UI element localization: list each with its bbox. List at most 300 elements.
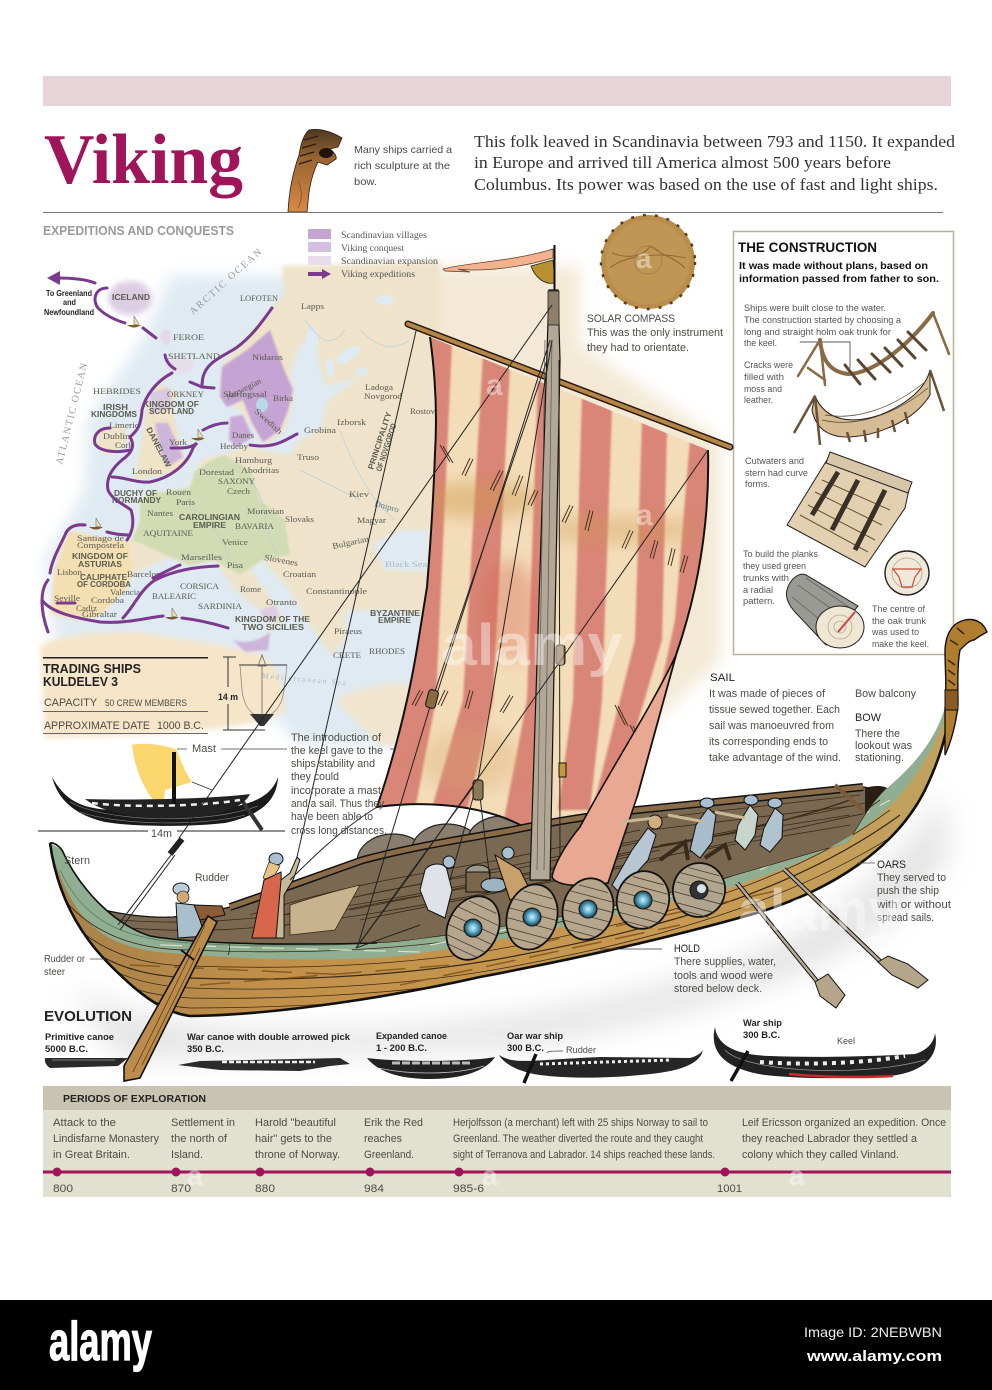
oars text: They served to <box>877 872 946 884</box>
map labels: NORMANDY <box>112 496 162 505</box>
14 m front-view diagram: 14 m <box>218 692 238 703</box>
sculpture note <box>354 144 452 188</box>
map legend: Scandinavian villages <box>341 231 427 241</box>
trunk cross-section illustration <box>885 551 929 595</box>
hold text <box>600 943 776 995</box>
construction step 5 text <box>871 604 929 649</box>
map labels: SARDINIA <box>198 601 243 611</box>
kuldelev ship diagram <box>52 744 278 830</box>
map labels: Mediterranean Sea <box>262 671 347 687</box>
evolution stage: oar war ship: Rudder <box>566 1045 596 1055</box>
crew at stern <box>173 795 783 938</box>
map labels: IRISH <box>103 403 128 412</box>
evolution stage: war ship <box>714 1018 936 1081</box>
evolution stage: war canoe: 350 B.C. <box>187 1044 224 1055</box>
map labels: ASTURIAS <box>78 560 123 569</box>
map labels: Croatian <box>283 569 317 579</box>
14 m front-view diagram <box>218 655 287 730</box>
reef ties <box>412 445 688 746</box>
map legend: Viking conquest <box>341 244 404 254</box>
construction step 2 text: Cracks were <box>744 360 793 370</box>
stock watermarks: alamy <box>441 613 623 678</box>
map labels: Moravian <box>247 506 285 516</box>
bow text: lookout was <box>855 740 912 752</box>
construction step 5 text: make the keel. <box>872 639 929 649</box>
construction step 3 text: forms. <box>745 479 770 489</box>
timeline years: 880 <box>255 1183 275 1195</box>
log illustration <box>786 574 864 648</box>
map labels: Izborsk <box>337 417 367 427</box>
intro text: Columbus. Its power was based on the use of fast and light ships. <box>474 175 938 194</box>
british isles <box>135 383 185 480</box>
construction step 4 text: they used green <box>743 561 806 571</box>
event 800: in Great Britain. <box>53 1149 130 1161</box>
bow text <box>855 688 916 764</box>
bow text: There the <box>855 728 900 740</box>
sculpture note: bow. <box>354 176 377 188</box>
map labels: Paris <box>176 497 195 507</box>
deck frame illustration <box>787 452 912 567</box>
map labels: Bulgarian <box>331 533 370 551</box>
solar compass text <box>587 313 723 354</box>
timeline years: 984 <box>364 1183 384 1195</box>
construction step 1 text: Ships were built close to the water. <box>744 303 886 313</box>
sail <box>376 336 710 825</box>
part labels: stern, rudder, steer <box>44 855 229 978</box>
carved dragon prow <box>945 620 987 755</box>
map labels: Hamburg <box>235 455 273 465</box>
evolution stage: war canoe: War canoe with double arrowed pick <box>187 1032 351 1043</box>
sail text <box>709 672 841 764</box>
trading ships table <box>43 657 208 734</box>
black hull <box>52 777 278 826</box>
map labels: SHETLAND <box>168 351 220 361</box>
map labels: Magyar <box>357 515 386 525</box>
map labels: OF CORDOBA <box>77 580 131 589</box>
stock watermarks: a <box>789 1160 805 1191</box>
event 985-6: Greenland. The weather diverted the route and they caught <box>453 1133 703 1145</box>
keel paragraph: have been able to <box>291 811 373 823</box>
event 880: hair" gets to the <box>255 1133 332 1145</box>
evolution stage: primitive canoe: Primitive canoe <box>45 1032 114 1043</box>
construction step 1 text <box>744 303 901 348</box>
event 985-6: sight of Terranova and Labrador. 14 ships reached these lands. <box>453 1149 715 1161</box>
timeline <box>43 1168 951 1176</box>
icon: carved bow sculpture <box>288 129 342 212</box>
map labels: PRINCIPALITY <box>366 410 394 471</box>
evolution stage: war ship: War ship <box>743 1018 782 1029</box>
purple: scandinavian villages <box>220 330 293 442</box>
map labels: CAROLINGIAN <box>179 513 240 522</box>
14m dimension: 14m <box>151 828 172 840</box>
evolution stage: expanded canoe: Expanded canoe <box>376 1031 447 1042</box>
intro text: This folk leaved in Scandinavia between 793 and 1150. It expanded <box>474 132 956 151</box>
sculpture note: rich sculpture at the <box>354 160 450 172</box>
trading ships table: TRADING SHIPS <box>43 661 141 676</box>
map labels: ARCTIC OCEAN <box>188 247 264 317</box>
map labels: Shiringssal <box>223 389 268 399</box>
construction step 5 text: the oak trunk <box>872 616 927 626</box>
yard <box>408 324 730 447</box>
mast <box>530 290 560 880</box>
map labels: Slovenes <box>264 552 299 568</box>
keel paragraph <box>291 732 387 837</box>
event 1001 <box>742 1117 946 1161</box>
event 1001: colony which they called Vinland. <box>742 1149 899 1161</box>
construction step 2 text <box>744 360 793 405</box>
map labels: LOFOTEN <box>240 293 278 303</box>
stock watermarks: a <box>636 499 653 532</box>
part labels: stern, rudder, steer: Stern <box>64 855 90 867</box>
map legend: Scandinavian expansion <box>341 257 438 267</box>
small boats on routes <box>89 316 205 620</box>
map labels: TWO SICILIES <box>242 623 305 632</box>
map labels: BYZANTINE <box>370 609 421 618</box>
hull frame illustration <box>794 370 944 445</box>
title: Viking <box>44 121 243 199</box>
sea <box>45 276 432 745</box>
map labels: Lapps <box>301 301 324 311</box>
stock watermarks: a <box>636 243 652 274</box>
event 870: Settlement in <box>171 1117 235 1129</box>
map labels: Limeric <box>109 420 139 430</box>
rigging ropes <box>118 305 708 948</box>
rivers and borders <box>180 320 410 560</box>
map labels: Lisbon <box>57 567 83 577</box>
map labels: KINGDOM OF <box>72 552 128 561</box>
solar compass text: This was the only instrument <box>587 327 723 339</box>
panel: the construction <box>734 232 954 654</box>
evolution stage: war ship: Keel <box>837 1036 855 1047</box>
plank lines <box>40 800 930 1008</box>
lakes of the north <box>306 295 394 378</box>
solar compass text: SOLAR COMPASS <box>587 313 675 325</box>
map labels: To Greenland <box>46 289 92 298</box>
map labels: DUCHY OF <box>114 489 157 498</box>
map labels: Marseilles <box>181 552 222 562</box>
map labels <box>44 247 436 687</box>
trading ships table: 50 CREW MEMBERS <box>105 698 187 708</box>
construction step 4 text: trunks with <box>743 573 789 583</box>
event 800 <box>53 1117 159 1161</box>
map labels: Dnipro <box>373 498 400 514</box>
evolution stage: war ship: 300 B.C. <box>743 1030 780 1041</box>
map labels: ICELAND <box>112 293 150 302</box>
oars text: spread sails. <box>877 912 934 924</box>
event 1001: Leif Ericsson organized an expedition. Once <box>742 1117 946 1129</box>
map labels: DANELAW <box>144 426 173 469</box>
map labels: BALEARIC <box>152 591 196 601</box>
map labels: AQUITAINE <box>143 528 193 538</box>
steering oar <box>124 916 217 1081</box>
map labels: Compostela <box>77 540 124 550</box>
footer bar <box>0 1300 992 1390</box>
event 880: throne of Norway. <box>255 1149 340 1161</box>
map labels: Abodritas <box>241 465 279 475</box>
sail text: tissue sewed together. Each <box>709 704 840 716</box>
map labels: Rouen <box>166 487 192 497</box>
evolution stage: oar war ship: Oar war ship <box>507 1031 563 1042</box>
oars text <box>857 859 951 924</box>
map labels: KINGDOM OF THE <box>235 615 311 624</box>
right oars <box>737 869 928 1008</box>
stock watermarks: a <box>486 369 503 402</box>
map labels: Newfoundland <box>44 308 94 317</box>
map labels: Cadiz <box>76 603 97 613</box>
bow text: BOW <box>855 712 882 724</box>
construction step 4 text: a radial <box>743 585 773 595</box>
map labels: Novgorod <box>364 391 403 401</box>
part labels: stern, rudder, steer: Rudder <box>195 872 229 884</box>
map legend: Viking expeditions <box>341 270 415 280</box>
construction step 5 text: The centre of <box>872 604 925 614</box>
hull interior <box>62 785 890 944</box>
stock watermarks: a <box>187 1160 203 1191</box>
map labels: Swedish <box>253 406 285 437</box>
periods header band <box>43 1086 951 1110</box>
map labels: Nantes <box>147 508 173 518</box>
masthead flag <box>443 245 556 290</box>
map labels: Valencia <box>110 587 140 597</box>
trading ships table: KULDELEV 3 <box>43 674 118 689</box>
construction step 1 text: long and straight holm oak trunk for <box>744 327 891 337</box>
map labels: KINGDOMS <box>91 410 138 419</box>
footer logo: alamy <box>49 1310 152 1372</box>
event 800: Attack to the <box>53 1117 116 1129</box>
map labels: Constantinople <box>306 586 367 596</box>
periods heading: PERIODS OF EXPLORATION <box>63 1093 206 1105</box>
event 985-6: Herjolfsson (a merchant) left with 25 ships Norway to sail to <box>453 1117 708 1129</box>
map labels: SCOTLAND <box>149 407 194 416</box>
map labels: Santiago de <box>77 533 124 543</box>
map labels: Nidaros <box>252 352 283 362</box>
map labels: CORSICA <box>180 581 220 591</box>
event 1001: they reached Labrador they settled a <box>742 1133 918 1145</box>
event 985-6 <box>453 1117 715 1161</box>
timeline years: 870 <box>171 1183 191 1195</box>
construction subheading: It was made without plans, based on <box>739 260 928 272</box>
map labels: Otranto <box>266 597 297 607</box>
timeline years: 1001 <box>717 1183 742 1195</box>
construction step 5 text: was used to <box>871 627 919 637</box>
map labels: London <box>132 466 163 476</box>
map labels: Rome <box>240 584 261 594</box>
green strake <box>50 708 948 960</box>
icon: solar compass <box>601 215 695 309</box>
map: expeditions and conquests <box>40 247 720 745</box>
expeditions heading: EXPEDITIONS AND CONQUESTS <box>43 224 234 238</box>
construction step 4 text <box>743 549 818 606</box>
construction step 2 text: filled with <box>744 372 784 382</box>
hold text: HOLD <box>674 943 700 955</box>
footer url: www.alamy.com <box>806 1348 942 1365</box>
keel paragraph: and a sail. Thus they <box>291 798 384 810</box>
construction step 4 text: To build the planks <box>743 549 818 559</box>
map labels: Norwegian <box>224 375 263 402</box>
panel: periods of exploration <box>43 1086 951 1197</box>
oars text: with or without <box>876 899 951 911</box>
map labels: Ladoga <box>365 382 393 392</box>
map labels: EMPIRE <box>378 616 412 625</box>
oars text: OARS <box>877 859 906 871</box>
part labels: stern, rudder, steer: Rudder or <box>44 954 86 965</box>
map labels: Dublin <box>103 431 131 441</box>
event 800: Lindisfarne Monastery <box>53 1133 159 1145</box>
expedition routes <box>42 271 297 632</box>
carolingian green <box>132 455 290 575</box>
construction step 3 text <box>745 456 808 489</box>
evolution stage: expanded canoe <box>367 1031 495 1079</box>
oars text: push the ship <box>877 885 939 897</box>
keel illustration <box>798 313 949 385</box>
sail text: its corresponding ends to <box>709 736 828 748</box>
land <box>50 262 440 655</box>
event 880 <box>255 1117 340 1161</box>
map labels: FEROE <box>173 332 204 342</box>
hold text: There supplies, water, <box>674 956 776 968</box>
sail text: take advantage of the wind. <box>709 752 841 764</box>
part labels: stern, rudder, steer: steer <box>44 967 66 978</box>
keel paragraph: they could <box>291 771 339 783</box>
cream map fade behind sail <box>300 266 720 735</box>
keel paragraph: ships stability and <box>291 758 375 770</box>
mast label: Mast <box>192 743 216 755</box>
event 880: Harold "beautiful <box>255 1117 336 1129</box>
map labels: Czech <box>227 486 251 496</box>
keel paragraph: cross long distances. <box>291 825 387 837</box>
top banner <box>43 76 951 106</box>
map labels: Rostov <box>410 406 436 416</box>
map labels: RHODES <box>369 646 405 656</box>
map labels: Kiev <box>349 489 370 499</box>
event 870: Island. <box>171 1149 203 1161</box>
sail text: sail was manoeuvred from <box>709 720 834 732</box>
hold text: stored below deck. <box>674 983 762 995</box>
map labels: Hedeby <box>220 441 249 451</box>
map labels: and <box>63 298 76 307</box>
map labels: CRETE <box>333 650 361 660</box>
far side shields <box>357 816 538 890</box>
sail text: SAIL <box>710 672 735 684</box>
bow text: Bow balcony <box>855 688 916 700</box>
map labels: KINGDOM OF <box>143 400 199 409</box>
keel paragraph: The introduction of <box>291 732 382 744</box>
construction step 4 text: pattern. <box>743 596 775 606</box>
evolution section <box>44 1008 936 1083</box>
construction subheading: information passed from father to son. <box>739 273 939 285</box>
helmsman <box>173 883 225 938</box>
image id: Image ID: 2NEBWBN <box>804 1324 942 1340</box>
side shields <box>436 857 731 968</box>
construction step 2 text: moss and <box>744 384 782 394</box>
map labels: BAVARIA <box>235 521 275 531</box>
lookout with red cape <box>252 853 300 938</box>
evolution stage: expanded canoe: 1 - 200 B.C. <box>376 1043 427 1054</box>
map labels: York <box>169 437 188 447</box>
map legend <box>308 229 438 280</box>
crew working at barrels <box>420 847 530 918</box>
event 984: reaches <box>364 1133 402 1145</box>
evolution heading: EVOLUTION <box>44 1008 132 1025</box>
map labels: HEBRIDES <box>93 386 141 396</box>
construction subheading <box>739 260 939 285</box>
construction step 1 text: The construction started by choosing a <box>744 315 901 325</box>
construction heading: THE CONSTRUCTION <box>738 239 877 255</box>
map labels: ATLANTIC OCEAN <box>54 362 90 466</box>
lower sail lobe over the deck <box>552 655 676 885</box>
construction step 1 text: the keel. <box>744 338 777 348</box>
map labels: Seville <box>54 593 80 603</box>
map labels: Dorestad <box>199 467 235 477</box>
keel paragraph: the keel gave to the <box>291 745 383 757</box>
map labels: SAXONY <box>218 476 255 486</box>
map labels: Pisa <box>227 560 243 570</box>
evolution stage: oar war ship: 300 B.C. <box>507 1043 544 1054</box>
event 984: Erik the Red <box>364 1117 423 1129</box>
halyard and blocks <box>556 360 566 860</box>
timeline years: 800 <box>53 1183 73 1195</box>
event 870: the north of <box>171 1133 228 1145</box>
construction step 2 text: leather. <box>744 395 773 405</box>
map labels: Slovaks <box>285 514 314 524</box>
evolution stage: primitive canoe: 5000 B.C. <box>45 1044 88 1055</box>
evolution stage: oar war ship <box>499 1031 703 1083</box>
stock watermarks <box>187 243 900 1191</box>
construction step 3 text: Cutwaters and <box>745 456 804 466</box>
construction step 3 text: stern had curve <box>745 468 808 478</box>
sculpture note: Many ships carried a <box>354 144 452 156</box>
map labels: Barcelona <box>127 569 165 579</box>
map labels: Cordoba <box>91 595 124 605</box>
timeline years <box>53 1183 742 1195</box>
event 984 <box>364 1117 423 1161</box>
event 984: Greenland. <box>364 1149 414 1161</box>
stock watermarks: a <box>482 1160 498 1191</box>
bow text: stationing. <box>855 752 904 764</box>
map labels: ORKNEY <box>167 389 204 399</box>
keel paragraph: incorporate a mast <box>291 785 381 797</box>
evolution stage: war canoe <box>178 1032 351 1071</box>
stock watermarks: alamy <box>738 878 900 943</box>
trading ships table: CAPACITY <box>44 697 98 709</box>
map labels: CALIPHATE <box>80 573 128 582</box>
map labels: Cork <box>115 440 134 450</box>
evolution stage: primitive canoe <box>45 1032 128 1068</box>
solar compass text: they had to orientate. <box>587 342 689 354</box>
north africa and southern land <box>40 632 285 738</box>
yellow sail <box>132 744 192 810</box>
intro text: in Europe and arrived till America almost 500 years before <box>474 153 891 172</box>
rowers at bow <box>612 795 783 895</box>
trading ships table: APPROXIMATE DATE <box>44 720 150 732</box>
iberia tone <box>52 532 132 620</box>
event 870 <box>171 1117 235 1161</box>
timeline years: 985-6 <box>453 1183 484 1195</box>
hold text: tools and wood were <box>674 970 773 982</box>
trading ships table: 1000 B.C. <box>157 720 204 732</box>
map labels: Gibraltar <box>82 609 117 619</box>
map labels: Piraeus <box>334 626 362 636</box>
map labels: OF NOVGOROD <box>374 422 398 473</box>
map labels: Truso <box>297 452 319 462</box>
map labels: Venice <box>222 537 248 547</box>
hull exterior <box>40 705 950 1016</box>
soft shadow under ship <box>70 790 950 1060</box>
map labels: Danes <box>232 430 254 440</box>
map labels: EMPIRE <box>193 521 227 530</box>
map labels: Black Sea <box>385 559 427 569</box>
map labels: Grobina <box>304 425 336 435</box>
